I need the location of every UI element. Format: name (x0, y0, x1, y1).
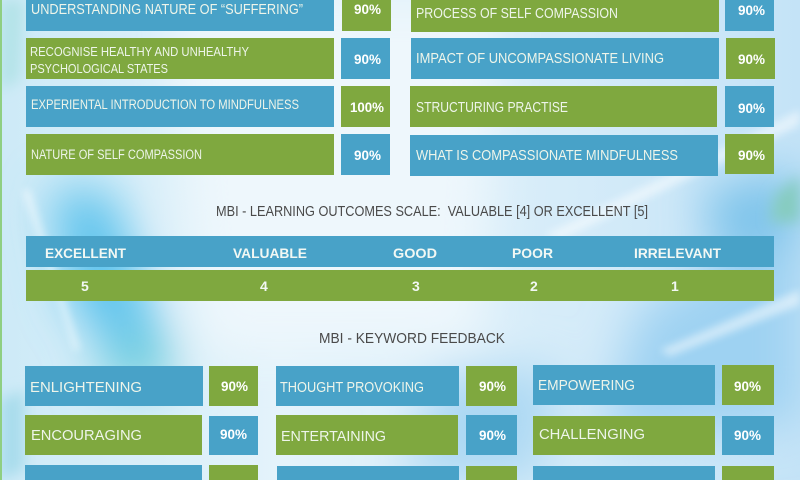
row: what is compassionate mindfulness: 90% (738, 148, 765, 163)
keyword: encouraging (25, 415, 258, 455)
keyword: entertaining: 90% (479, 428, 506, 443)
row: recognise healthy and unhealthy states: PSYCHOLOGICAL STATES (30, 61, 168, 76)
keyword: challenging: CHALLENGING (539, 427, 645, 443)
row: recognise healthy and unhealthy states: RECOGNISE HEALTHY AND UNHEALTHY (30, 44, 249, 59)
panel: left outcomes list (26, 0, 391, 175)
scale values row: 4 (260, 278, 268, 294)
row: structuring practise (410, 86, 774, 127)
keyword: challenging: 90% (734, 428, 761, 443)
scale values row: 5 (81, 278, 89, 294)
row: impact of uncompassionate living: 90% (738, 52, 765, 67)
keyword: challenging (533, 416, 774, 455)
keyword: enlightening (25, 366, 258, 406)
scale values row: 2 (530, 278, 538, 294)
row: structuring practise: STRUCTURING PRACTISE (416, 100, 568, 116)
heading: learning outcomes scale: MBI - LEARNING OUTCOMES SCALE: VALUABLE [4] OR EXCELLENT [5] (216, 204, 648, 220)
keyword: cropped third row (25, 465, 258, 480)
row: understanding nature of suffering: 90% (354, 2, 381, 17)
keyword: empowering (533, 365, 774, 405)
row: structuring practise: 90% (738, 101, 765, 116)
row: what is compassionate mindfulness (410, 134, 774, 176)
scale labels row: VALUABLE (233, 245, 307, 261)
keyword: thought provoking: THOUGHT PROVOKING (280, 380, 424, 396)
row: understanding nature of suffering: UNDERSTANDING NATURE OF “SUFFERING” (31, 2, 303, 18)
keyword: entertaining (276, 415, 517, 455)
keyword: enlightening: 90% (221, 379, 248, 394)
row: process of self compassion: 90% (738, 3, 765, 18)
keyword: cropped third row (277, 466, 517, 480)
row: recognise healthy and unhealthy states (26, 38, 390, 79)
panel: keyword column 1 (25, 366, 258, 480)
scale values row: 1 (671, 278, 679, 294)
keyword: empowering: 90% (734, 379, 761, 394)
scale values row: 3 (412, 278, 420, 294)
keyword: enlightening: ENLIGHTENING (30, 380, 142, 396)
row: process of self compassion (411, 0, 774, 32)
keyword: empowering: EMPOWERING (538, 378, 635, 394)
row: impact of uncompassionate living (411, 38, 775, 79)
scale labels row (26, 236, 774, 267)
row: experiental introduction to mindfulness: 100% (350, 100, 384, 115)
row: recognise healthy and unhealthy states: 90% (354, 52, 381, 67)
row: experiental introduction to mindfulness (26, 86, 390, 127)
keyword: cropped third row (533, 466, 774, 480)
row: impact of uncompassionate living: IMPACT OF UNCOMPASSIONATE LIVING (416, 51, 664, 67)
heading: keyword feedback: MBI - KEYWORD FEEDBACK (319, 331, 505, 347)
scale labels row: GOOD (393, 245, 437, 261)
row: nature of self compassion: NATURE OF SELF COMPASSION (31, 147, 202, 162)
row: understanding nature of suffering (26, 0, 391, 31)
row: nature of self compassion: 90% (354, 148, 381, 163)
panel: right outcomes list (410, 0, 775, 176)
row: what is compassionate mindfulness: WHAT IS COMPASSIONATE MINDFULNESS (416, 148, 678, 164)
panel: keyword column 2 (276, 366, 517, 480)
scale labels row: EXCELLENT (45, 245, 126, 261)
row: nature of self compassion (26, 134, 390, 175)
keyword: thought provoking (276, 366, 517, 406)
row: process of self compassion: PROCESS OF SELF COMPASSION (416, 6, 618, 22)
keyword: thought provoking: 90% (479, 379, 506, 394)
scale values row (26, 270, 774, 301)
keyword: encouraging: ENCOURAGING (31, 428, 142, 444)
panel: keyword column 3 (533, 365, 774, 480)
table: rating scale (26, 236, 774, 301)
row: experiental introduction to mindfulness: EXPERIENTAL INTRODUCTION TO MINDFULNESS (31, 97, 299, 112)
scale labels row: POOR (512, 245, 553, 261)
keyword: entertaining: ENTERTAINING (281, 429, 386, 445)
keyword: encouraging: 90% (220, 427, 247, 442)
scale labels row: IRRELEVANT (634, 245, 721, 261)
